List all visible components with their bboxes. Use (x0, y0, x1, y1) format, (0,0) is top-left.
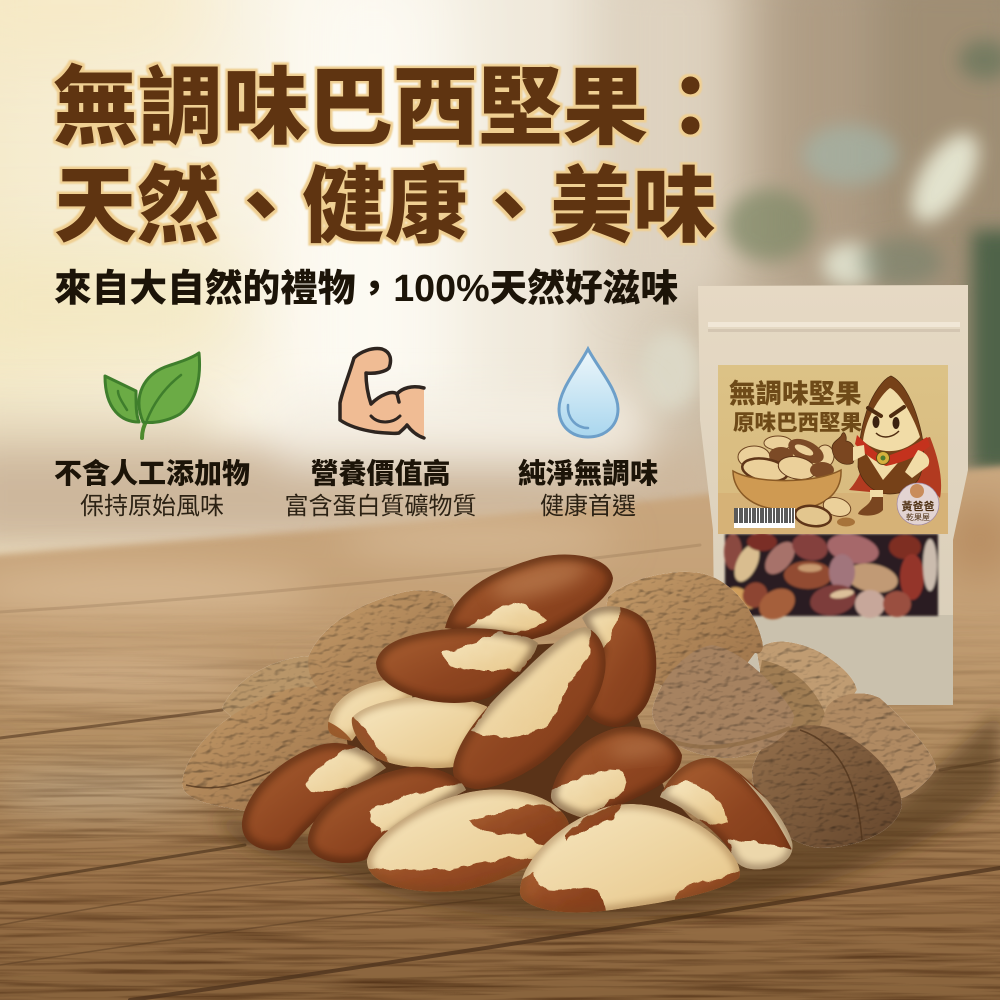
kernel: right lower (660, 758, 792, 870)
icon: leaf (105, 353, 200, 438)
icon: water drop (559, 349, 618, 437)
bag zipper (708, 322, 960, 332)
title: 天然、健康、美味 (54, 160, 716, 253)
icon: flexed arm (340, 349, 424, 438)
feature: pure unseasoned (518, 457, 658, 520)
bag body (698, 285, 968, 706)
brand badge: 黃爸爸 (902, 499, 934, 513)
barcode (734, 508, 795, 528)
product bag (698, 285, 968, 706)
dark gap behind kernels (345, 640, 720, 860)
bag window with nuts (724, 530, 938, 626)
loose nuts (794, 495, 855, 528)
kernel: cream front left (348, 697, 490, 772)
brand badge: 乾果屋 (906, 512, 930, 522)
title (53, 61, 733, 253)
feature: high nutrition: 營養價值高 (310, 457, 451, 489)
label subtitle: 原味巴西堅果 (733, 411, 863, 435)
feature: no additives: 不含人工添加物 (54, 457, 250, 489)
pile of Brazil nuts (182, 554, 936, 920)
brand badge (897, 483, 939, 525)
kernel: top brown (445, 554, 613, 640)
kernel: cream back (325, 680, 412, 745)
label title: 無調味堅果 (729, 379, 862, 409)
kernel: right centre (548, 727, 682, 820)
feature: no additives (54, 457, 250, 520)
kernel: front cream right (520, 804, 740, 912)
kernel: lower mid brown (308, 767, 470, 863)
kernel: front cream left (367, 789, 569, 892)
mascot nut character (832, 376, 941, 516)
feature: no additives: 保持原始風味 (80, 493, 224, 520)
kernel: lower left brown (242, 743, 390, 851)
kernel: standing right (578, 602, 656, 727)
feature: high nutrition (284, 457, 476, 520)
nuts in bowl (738, 434, 834, 485)
feature: pure unseasoned: 健康首選 (540, 493, 636, 520)
in-shell nuts, back layer (182, 572, 936, 848)
lower bag panel (713, 615, 953, 705)
nut cast shadow (215, 710, 1000, 919)
shell seams (186, 728, 862, 840)
title: 無調味巴西堅果： (53, 61, 733, 156)
feature: pure unseasoned: 純淨無調味 (518, 457, 658, 489)
blurred background: room and window light (0, 0, 1000, 570)
subtitle: 來自大自然的禮物，100%天然好滋味 (54, 267, 678, 309)
wooden table (0, 465, 1000, 1000)
bowl (733, 470, 841, 510)
feature: high nutrition: 富含蛋白質礦物質 (284, 493, 476, 520)
kernel: large centre (453, 627, 606, 789)
product label (718, 365, 948, 534)
kernel: centre-left brown (376, 628, 545, 703)
